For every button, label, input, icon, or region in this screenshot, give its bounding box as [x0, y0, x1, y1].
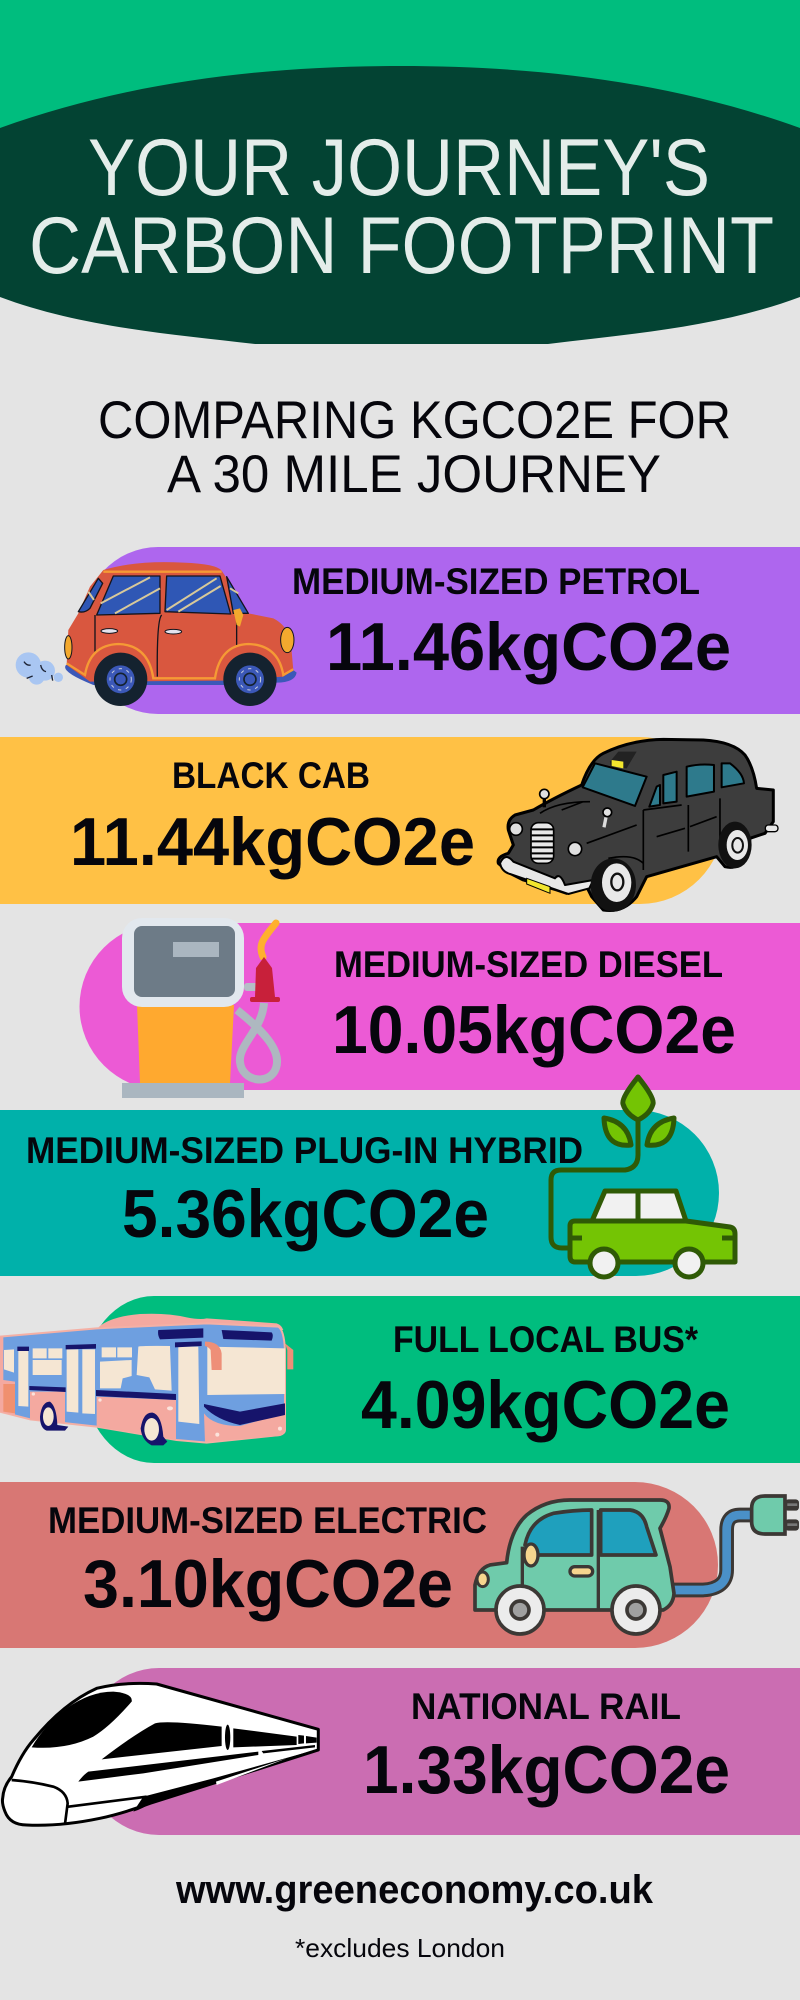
header: dark banner shape: [0, 66, 800, 344]
label: medium-sized electric: MEDIUM-SIZED ELECTRIC: [48, 1500, 487, 1541]
footnote: *excludes London: [295, 1933, 505, 1963]
icon: black cab: [498, 739, 778, 912]
subtitle: A 30 MILE JOURNEY: [167, 445, 661, 504]
icon: red petrol car: [16, 562, 297, 706]
value: 1.33: 1.33kgCO2e: [363, 1732, 730, 1808]
panel: medium-sized petrol: [16, 547, 800, 714]
subtitle: COMPARING KGCO2E FOR: [98, 391, 731, 450]
header band: [0, 0, 800, 140]
icon: bus: [0, 1314, 293, 1445]
panel: full local bus: [0, 1296, 800, 1463]
title: YOUR JOURNEY'S: [88, 123, 710, 213]
value: 5.36: 5.36kgCO2e: [122, 1176, 489, 1252]
icon: fuel pump: [122, 918, 280, 1098]
label: medium-sized diesel: MEDIUM-SIZED DIESEL: [334, 944, 723, 985]
panel: medium-sized diesel: [80, 918, 800, 1098]
icon: electric car with plug: [475, 1496, 799, 1634]
label: black cab: BLACK CAB: [172, 755, 370, 796]
label: national rail: NATIONAL RAIL: [411, 1686, 681, 1727]
label: medium-sized petrol: MEDIUM-SIZED PETROL: [292, 561, 700, 602]
value: 10.05: 10.05kgCO2e: [332, 992, 736, 1068]
panel: black cab: [0, 737, 778, 912]
icon: green hybrid car with leaves: [551, 1077, 735, 1277]
panel: national rail: [2, 1668, 800, 1835]
value: 11.46: 11.46kgCO2e: [326, 609, 731, 685]
subtitle: [98, 391, 731, 504]
value: 4.09: 4.09kgCO2e: [361, 1367, 730, 1443]
title: [29, 123, 774, 291]
icon: high-speed train: [2, 1683, 318, 1825]
value: 3.10: 3.10kgCO2e: [83, 1546, 453, 1622]
label: full local bus: FULL LOCAL BUS*: [393, 1319, 699, 1360]
label: medium-sized plug-in hybrid: MEDIUM-SIZED PLUG-IN HYBRID: [26, 1130, 583, 1171]
panel: medium-sized plug-in hybrid: [0, 1077, 735, 1277]
panel: medium-sized electric: [0, 1482, 799, 1648]
website url: www.greeneconomy.co.uk: [175, 1868, 654, 1912]
value: 11.44: 11.44kgCO2e: [70, 804, 475, 880]
